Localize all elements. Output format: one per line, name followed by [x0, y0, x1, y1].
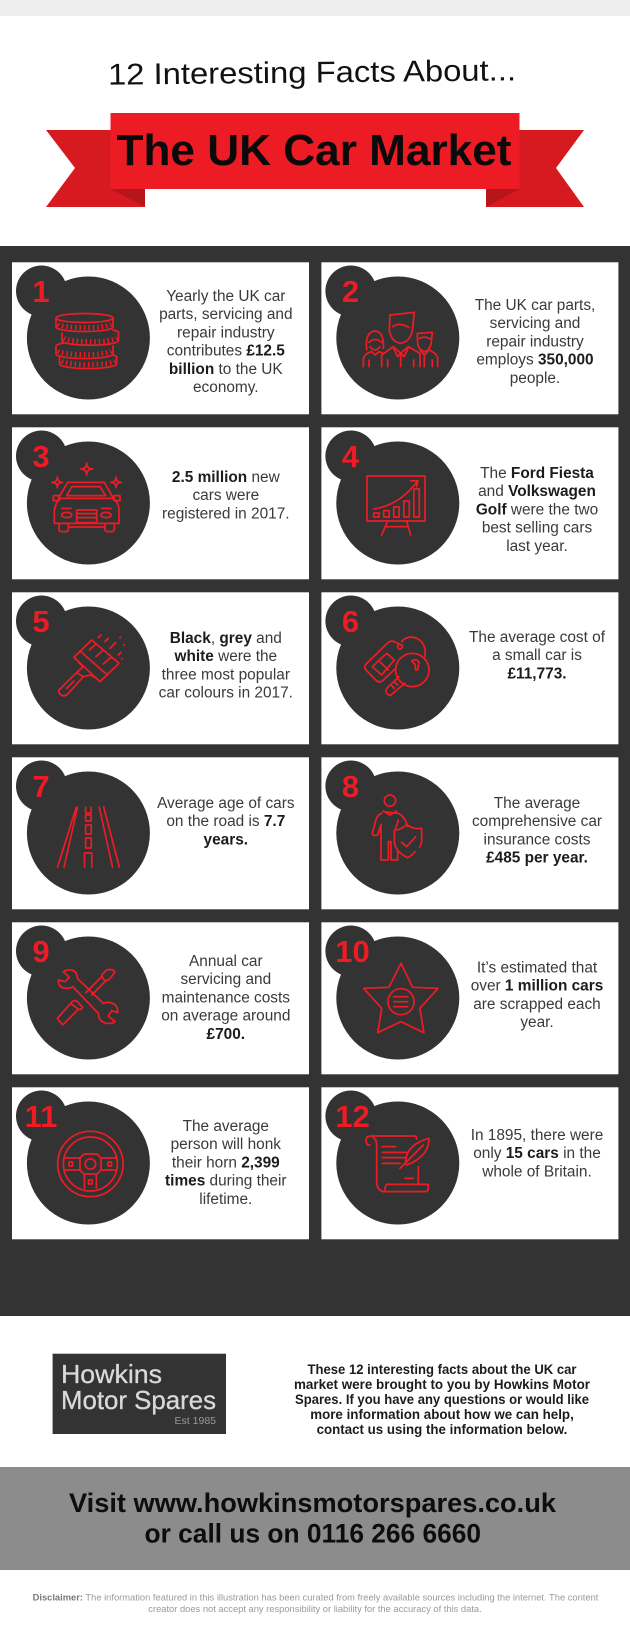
icon: car with sparkles [52, 463, 121, 532]
panel: fact 5: Black, grey and [170, 630, 282, 647]
panel: fact 4: The Ford Fiesta [480, 465, 594, 482]
panel: fact 3: 3 [32, 439, 50, 474]
panel: fact 2 [321, 262, 618, 414]
panel: fact 10: are scrapped each [473, 996, 601, 1013]
icon: scroll and quill [366, 1136, 429, 1192]
panel: fact 1: parts, servicing and [159, 306, 293, 323]
panel: fact 11: times during their [165, 1173, 287, 1190]
panel: fact 2: people. [510, 370, 560, 387]
panel: fact 12: In 1895, there were [471, 1127, 603, 1144]
sponsor blurb: These 12 interesting facts about the UK car [308, 1362, 577, 1377]
panel: fact 1: contributes £12.5 [167, 343, 285, 360]
panel: fact 5 [12, 592, 309, 744]
disclaimer: Disclaimer: The information featured in this illustration has been curated from freely available sources including the internet. The content [33, 1592, 598, 1602]
sponsor blurb: contact us using the information below. [317, 1422, 567, 1437]
panel: fact 5: three most popular [162, 666, 290, 683]
panel: fact 2: 2 [342, 274, 359, 309]
panel: fact 1 [12, 262, 309, 414]
panel: fact 12: whole of Britain. [481, 1163, 592, 1180]
panel: fact 6: The average cost of [469, 629, 606, 646]
panel: fact 4: Golf were the two [476, 501, 598, 518]
panel: fact 2: The UK car parts, [475, 297, 595, 314]
panel: fact 1: economy. [193, 379, 259, 396]
panel: fact 4: best selling cars [482, 520, 592, 537]
panel: fact 11: The average [183, 1118, 269, 1135]
panel: fact 9: 9 [32, 934, 50, 969]
panel: fact 4: last year. [506, 538, 568, 555]
panel: fact 10: year. [520, 1014, 554, 1031]
panel: fact 7 [12, 757, 309, 909]
panel: fact 4: 4 [342, 439, 360, 474]
icon: star with badge [364, 963, 438, 1033]
call to action band: Visit www.howkinsmotorspares.co.uk [69, 1488, 557, 1518]
panel: fact 1: 1 [32, 274, 50, 309]
panel: fact 6: £11,773. [507, 665, 567, 682]
panel: fact 5: white were the [174, 648, 277, 665]
panel: fact 9: on average around [161, 1008, 290, 1025]
panel: fact 10: It’s estimated that [477, 960, 598, 976]
panel: fact 8 [321, 757, 618, 909]
sponsor blurb: more information about how we can help, [310, 1407, 574, 1422]
panel: fact 11 [12, 1087, 309, 1239]
panel: fact 9: maintenance costs [162, 989, 290, 1006]
logo: Howkins Motor Spares: Motor Spares [61, 1385, 216, 1415]
icon: car keys [365, 637, 429, 696]
panel: fact 3: 2.5 million new [172, 469, 280, 486]
panel: fact 5: 5 [32, 604, 50, 639]
panel: fact 7: 7 [32, 769, 50, 804]
call to action band: or call us on 0116 266 6660 [145, 1518, 481, 1548]
panel: fact 11: person will honk [171, 1136, 281, 1153]
panel: fact 8: 8 [342, 769, 359, 804]
panel: fact 12: only 15 cars in the [473, 1145, 601, 1162]
panel: fact 1: billion to the UK [169, 361, 283, 378]
panel: fact 8: insurance costs [484, 831, 591, 848]
panel: fact 1: repair industry [177, 324, 275, 341]
panel: fact 7: years. [204, 831, 248, 848]
panel: fact 7: on the road is 7.7 [166, 813, 285, 830]
panel: fact 4: and Volkswagen [478, 483, 596, 500]
panel: fact 2: servicing and [490, 315, 580, 332]
panel: fact 11: 11 [25, 1099, 57, 1134]
logo: Howkins Motor Spares: Howkins [61, 1359, 162, 1389]
dark facts panel [0, 246, 630, 1316]
panel: fact 9: £700. [207, 1026, 245, 1043]
panel: fact 8: comprehensive car [472, 813, 602, 830]
icon: rising chart on easel [367, 476, 425, 535]
panel: fact 9 [12, 922, 309, 1074]
sponsor blurb [294, 1362, 591, 1437]
call to action band [0, 1467, 630, 1570]
panel: fact 6 [321, 592, 618, 744]
panel: fact 10: 10 [335, 934, 370, 969]
panel: fact 8: The average [494, 795, 580, 812]
icon: steering wheel [58, 1131, 123, 1197]
panel: fact 11: their horn 2,399 [172, 1154, 280, 1171]
panel: fact 7: Average age of cars [157, 795, 295, 812]
panel: fact 9: Annual car [189, 953, 263, 970]
logo: Howkins Motor Spares [53, 1354, 226, 1434]
icon: coins [56, 314, 119, 369]
panel: fact 3: registered in 2017. [162, 505, 290, 522]
panel: fact 8: £485 per year. [486, 850, 588, 867]
icon: people [363, 312, 438, 367]
red ribbon banner: The UK Car Market [116, 126, 512, 175]
panel: fact 5: car colours in 2017. [159, 685, 293, 702]
top grey strip [0, 0, 630, 16]
logo: Howkins Motor Spares: Est 1985 [175, 1415, 216, 1427]
panel: fact 3 [12, 427, 309, 579]
panel: fact 11: lifetime. [199, 1191, 252, 1208]
icon: wrench and screwdriver [57, 969, 118, 1025]
title: 12 Interesting Facts About... [108, 54, 516, 92]
panel: fact 10 [321, 922, 618, 1074]
panel: fact 12: 12 [335, 1099, 370, 1134]
panel: fact 9: servicing and [180, 971, 271, 988]
icon: person with shield [372, 795, 422, 860]
panel: fact 1: Yearly the UK car [166, 288, 285, 305]
panel: fact 2: employs 350,000 [476, 352, 594, 369]
panel: fact 2: repair industry [486, 333, 584, 350]
sponsor blurb: Spares. If you have any questions or would like [295, 1392, 589, 1407]
panel: fact 3: cars were [192, 487, 259, 504]
panel: fact 4 [321, 427, 618, 579]
icon: road [58, 807, 119, 867]
panel: fact 10: over 1 million cars [471, 978, 603, 995]
sponsor blurb: market were brought to you by Howkins Motor [294, 1377, 591, 1392]
panel: fact 6: 6 [342, 604, 359, 639]
icon: paint brush [59, 635, 124, 696]
panel: fact 6: a small car is [492, 647, 582, 664]
red ribbon banner [46, 113, 584, 207]
panel: fact 12 [321, 1087, 618, 1239]
disclaimer: creator does not accept any responsibility or liability for the accuracy of this data. [148, 1604, 482, 1614]
